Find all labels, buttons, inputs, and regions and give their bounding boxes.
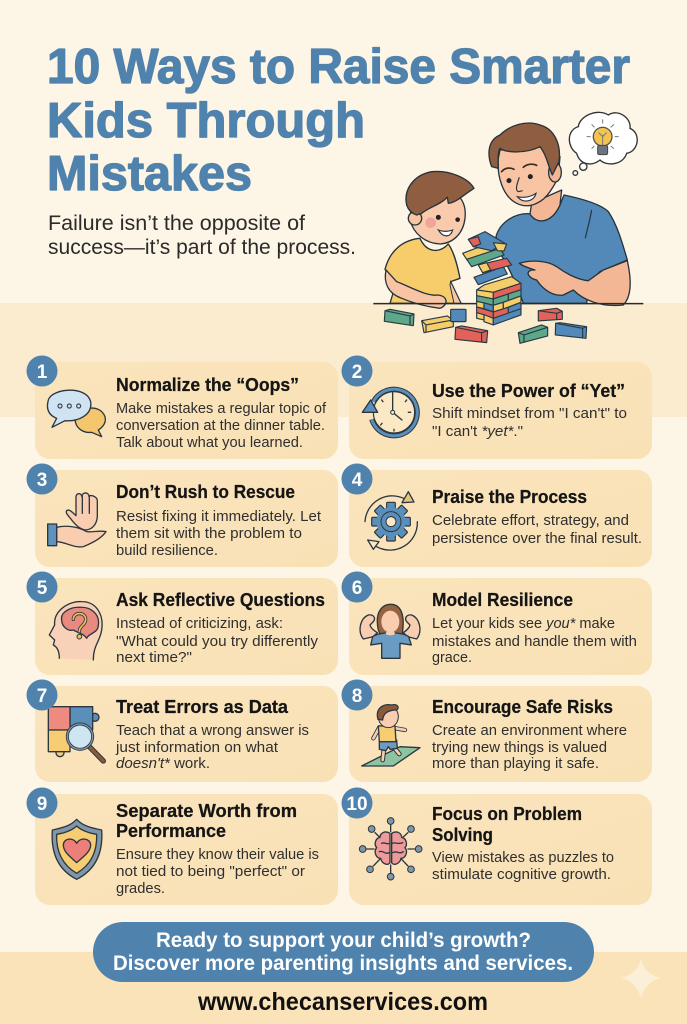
card background <box>349 470 652 567</box>
title: Mistakes <box>47 147 252 201</box>
card background <box>35 470 338 567</box>
number badge: 8 <box>352 686 362 707</box>
number badge <box>342 464 372 494</box>
tip body: "I can't *yet*." <box>432 424 523 440</box>
card background <box>35 362 338 459</box>
card background <box>35 578 338 675</box>
boy <box>385 171 474 308</box>
tip body: grace. <box>432 650 472 666</box>
tip body: persistence over the final result. <box>432 531 642 547</box>
tip body: not tied to being "perfect" or <box>116 864 305 880</box>
title: 10 Ways to Raise Smarter <box>47 40 630 94</box>
tip heading: Praise the Process <box>432 486 587 507</box>
card background <box>349 686 652 782</box>
tip body: conversation at the dinner table. <box>116 418 325 434</box>
tip body <box>432 723 627 772</box>
tip body <box>115 723 309 772</box>
call to action pill: Ready to support your child’s growth? <box>156 929 531 952</box>
tip body: more than playing it safe. <box>432 756 599 772</box>
icon: puzzle pieces and magnifier <box>48 707 103 761</box>
footer band <box>0 952 687 1024</box>
tip body: next time?" <box>116 650 192 666</box>
icon: speech bubbles <box>47 390 105 437</box>
tip body <box>116 616 319 666</box>
subtitle: success—it’s part of the process. <box>48 235 356 259</box>
number badge: 9 <box>37 794 47 815</box>
card background <box>35 794 338 905</box>
card background <box>349 362 652 459</box>
tip body <box>432 616 637 666</box>
tip heading <box>116 800 297 841</box>
tip heading: Ask Reflective Questions <box>116 589 325 610</box>
subtitle <box>48 211 356 259</box>
tip body <box>432 850 614 883</box>
tip heading: Performance <box>116 820 226 841</box>
panel: tip 6 <box>342 572 652 675</box>
panel: tip 5 <box>26 572 338 675</box>
icon: clock with return arrow <box>362 389 417 436</box>
number badge <box>342 356 372 386</box>
tip body: Teach that a wrong answer is <box>116 723 309 739</box>
tip body: Instead of criticizing, ask: <box>116 616 283 632</box>
call to action pill: Discover more parenting insights and services. <box>113 952 573 975</box>
tip body <box>116 509 321 559</box>
tip heading: Encourage Safe Risks <box>432 696 613 717</box>
father <box>489 123 630 305</box>
block tower <box>463 232 521 325</box>
card background <box>349 578 652 675</box>
tip body: build resilience. <box>116 543 218 559</box>
tip heading: Normalize the “Oops” <box>116 374 299 395</box>
number badge <box>342 680 372 710</box>
number badge: 6 <box>352 578 362 599</box>
title: Kids Through <box>47 94 365 148</box>
panel: tip 4 <box>342 464 652 567</box>
panel: tip 7 <box>26 680 338 782</box>
icon: gear with cycle arrows <box>365 492 417 550</box>
number badge <box>342 572 372 602</box>
icon: sparkle <box>621 959 661 998</box>
tip body: grades. <box>116 881 165 897</box>
tip body <box>432 513 642 547</box>
number badge: 7 <box>37 686 47 707</box>
tip heading: Don’t Rush to Rescue <box>116 481 295 502</box>
tip heading: Focus on Problem <box>432 803 582 824</box>
number badge: 3 <box>37 470 47 491</box>
tip body: them sit with the problem to <box>116 526 302 542</box>
tip body: just information on what <box>115 740 278 756</box>
tip heading: Use the Power of “Yet” <box>432 380 625 401</box>
tip body: Resist fixing it immediately. Let <box>116 509 321 525</box>
tip body <box>116 847 319 897</box>
tip body: Talk about what you learned. <box>116 435 303 451</box>
number badge <box>26 464 58 494</box>
tip body: mistakes and handle them with <box>432 634 637 650</box>
tip body: "What could you try differently <box>116 634 319 650</box>
panel: tip 9 <box>26 788 338 905</box>
card background <box>349 794 652 905</box>
number badge: 1 <box>37 362 48 383</box>
tip body: doesn't* work. <box>116 756 210 772</box>
number badge <box>26 680 58 710</box>
icon: brain with network nodes <box>359 818 422 880</box>
tip body: stimulate cognitive growth. <box>432 867 611 883</box>
tip body <box>116 401 327 451</box>
card background <box>35 686 338 782</box>
tip heading: Separate Worth from <box>116 800 297 821</box>
tip body: Shift mindset from "I can't" to <box>432 406 627 422</box>
icon: shield with heart <box>52 819 102 879</box>
panel: tip 3 <box>26 464 338 567</box>
icon: hand held back <box>48 493 106 547</box>
panel: tip 10 <box>342 788 652 905</box>
number badge <box>342 788 372 818</box>
tip body: View mistakes as puzzles to <box>432 850 614 866</box>
table line <box>373 301 643 306</box>
number badge: 2 <box>352 362 362 383</box>
icon: child stepping on mat <box>362 705 420 766</box>
table band <box>0 303 687 417</box>
tip body: Ensure they know their value is <box>116 847 319 863</box>
number badge <box>26 788 58 818</box>
icon: person flexing arms <box>360 604 420 658</box>
title <box>47 40 630 201</box>
number badge: 10 <box>346 794 368 815</box>
icon: head with brain and question mark <box>49 602 102 660</box>
illustration: father and son playing block tower <box>373 112 643 343</box>
tip heading <box>432 803 582 845</box>
tip body: Create an environment where <box>432 723 627 739</box>
tip body: Make mistakes a regular topic of <box>116 401 327 417</box>
tip heading: Treat Errors as Data <box>116 696 289 717</box>
panel: tip 8 <box>342 680 652 782</box>
tip body: Let your kids see you* make <box>432 616 615 632</box>
tip body: trying new things is valued <box>432 740 607 756</box>
number badge: 5 <box>37 578 48 599</box>
panel: tip 1 <box>26 356 338 459</box>
subtitle: Failure isn’t the opposite of <box>48 211 305 235</box>
tip body: Celebrate effort, strategy, and <box>432 513 629 529</box>
number badge <box>26 356 58 386</box>
tip heading: Solving <box>432 824 493 845</box>
panel: tip 2 <box>342 356 652 459</box>
call to action pill <box>93 922 594 982</box>
tip heading: Model Resilience <box>432 589 573 610</box>
number badge <box>26 572 58 602</box>
number badge: 4 <box>352 470 363 491</box>
loose blocks <box>384 308 587 343</box>
icon: thought bubble with light bulb <box>569 112 637 175</box>
website url: www.checanservices.com <box>197 988 488 1016</box>
tip body <box>432 406 627 440</box>
